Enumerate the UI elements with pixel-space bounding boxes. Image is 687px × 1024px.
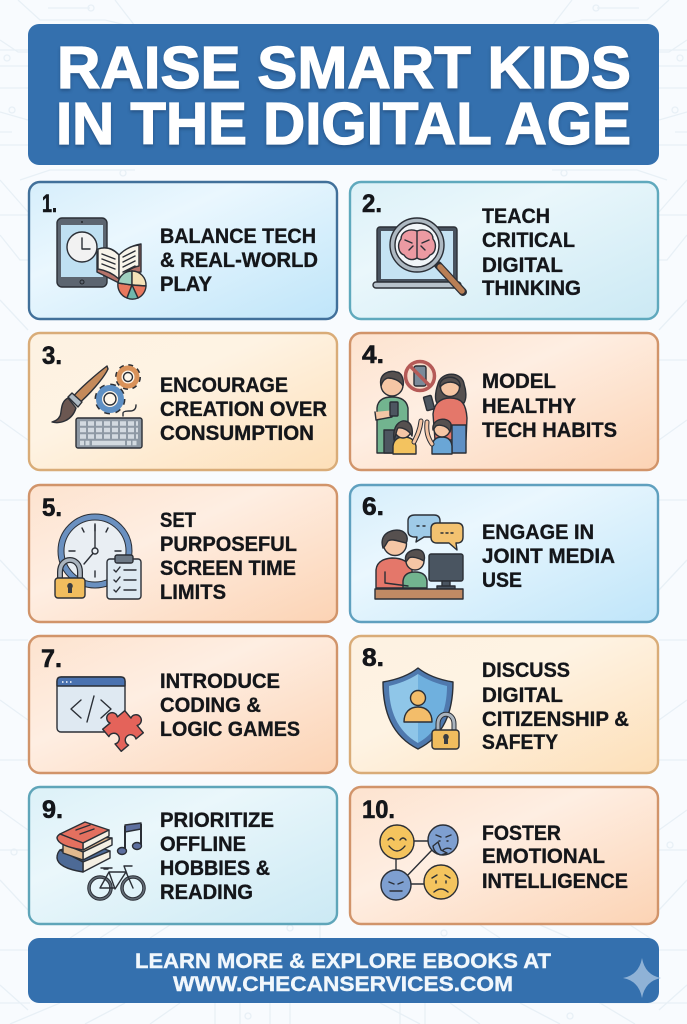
- label: INTRODUCE: [160, 669, 280, 693]
- footer banner: [28, 938, 661, 1003]
- title: IN THE DIGITAL AGE: [56, 91, 631, 157]
- label: SAFETY: [482, 730, 558, 754]
- panel: card 1: [29, 182, 337, 319]
- label: DIGITAL: [482, 683, 563, 707]
- label: LIMITS: [160, 580, 226, 604]
- icon: shield with person and padlock: [383, 668, 459, 749]
- title: RAISE SMART KIDS: [57, 35, 631, 101]
- label: BALANCE TECH: [160, 224, 316, 248]
- icon: paintbrush, gears and keyboard: [52, 366, 142, 448]
- label: TECH HABITS: [482, 418, 617, 442]
- panel: card 1: 1.: [42, 190, 57, 218]
- label: INTELLIGENCE: [482, 869, 628, 893]
- label: READING: [160, 880, 253, 904]
- panel: card 8: [350, 636, 658, 773]
- label: [482, 369, 617, 442]
- label: ENGAGE IN: [482, 520, 594, 544]
- panel: card 9: [29, 787, 337, 924]
- label: & REAL-WORLD: [160, 248, 318, 272]
- icon: laptop and magnified brain: [373, 218, 463, 292]
- label: [160, 508, 297, 604]
- label: [160, 808, 274, 904]
- label: [160, 669, 300, 741]
- label: [160, 373, 327, 445]
- label: DIGITAL: [482, 253, 563, 277]
- icon: books, music note and bicycle: [57, 822, 144, 899]
- label: ENCOURAGE: [160, 373, 288, 397]
- label: HEALTHY: [482, 394, 576, 418]
- icon: parent and child at computer: [375, 515, 463, 599]
- panel: card 3: 3.: [42, 342, 62, 370]
- panel: card 10: [350, 787, 658, 924]
- label: [482, 658, 629, 754]
- icon: code window and puzzle piece: [57, 677, 149, 751]
- label: THINKING: [482, 276, 581, 300]
- label: CREATION OVER: [160, 397, 327, 421]
- label: SCREEN TIME: [160, 556, 296, 580]
- icon: connected emotion faces: [380, 825, 458, 900]
- label: CRITICAL: [482, 228, 575, 252]
- label: FOSTER: [482, 821, 561, 845]
- header banner: [28, 24, 659, 165]
- panel: card 6: 6.: [362, 493, 384, 521]
- panel: card 5: 5.: [42, 494, 62, 522]
- label: [482, 520, 615, 592]
- label: [482, 204, 581, 300]
- label: CITIZENSHIP &: [482, 707, 629, 731]
- panel: card 4: 4.: [362, 341, 384, 369]
- label: PRIORITIZE: [160, 808, 274, 832]
- icon: clock, padlock and checklist: [55, 517, 141, 599]
- label: HOBBIES &: [160, 856, 270, 880]
- label: [160, 224, 318, 296]
- label: JOINT MEDIA: [482, 544, 615, 568]
- icon: tablet, book and ball: [57, 218, 146, 299]
- label: DISCUSS: [482, 658, 570, 682]
- panel: card 2: 2.: [362, 190, 382, 218]
- panel: card 7: 7.: [41, 645, 62, 673]
- panel: card 2: [350, 182, 658, 319]
- label: EMOTIONAL: [482, 844, 605, 868]
- label: OFFLINE: [160, 832, 246, 856]
- panel: card 9: 9.: [42, 796, 63, 824]
- label: SET: [160, 508, 196, 532]
- label: TEACH: [482, 204, 550, 228]
- panel: card 4: [350, 333, 658, 470]
- label: MODEL: [482, 369, 556, 393]
- panel: card 6: [350, 485, 658, 622]
- label: PLAY: [160, 272, 212, 296]
- footer text: LEARN MORE & EXPLORE EBOOKS AT: [135, 949, 551, 973]
- label: CONSUMPTION: [160, 421, 314, 445]
- icon: family with no-phone sign: [375, 362, 467, 454]
- panel: card 5: [29, 485, 337, 622]
- panel: card 7: [29, 636, 337, 773]
- panel: card 3: [29, 333, 337, 470]
- panel: card 8: 8.: [362, 644, 384, 672]
- label: USE: [482, 568, 522, 592]
- panel: card 10: 10.: [362, 796, 395, 824]
- label: PURPOSEFUL: [160, 532, 297, 556]
- label: CODING &: [160, 693, 261, 717]
- label: LOGIC GAMES: [160, 717, 300, 741]
- icon: sparkle star: [623, 958, 661, 998]
- footer text: WWW.CHECANSERVICES.COM: [173, 972, 513, 996]
- footer text: [135, 949, 551, 996]
- label: [482, 821, 628, 893]
- title: [56, 35, 631, 157]
